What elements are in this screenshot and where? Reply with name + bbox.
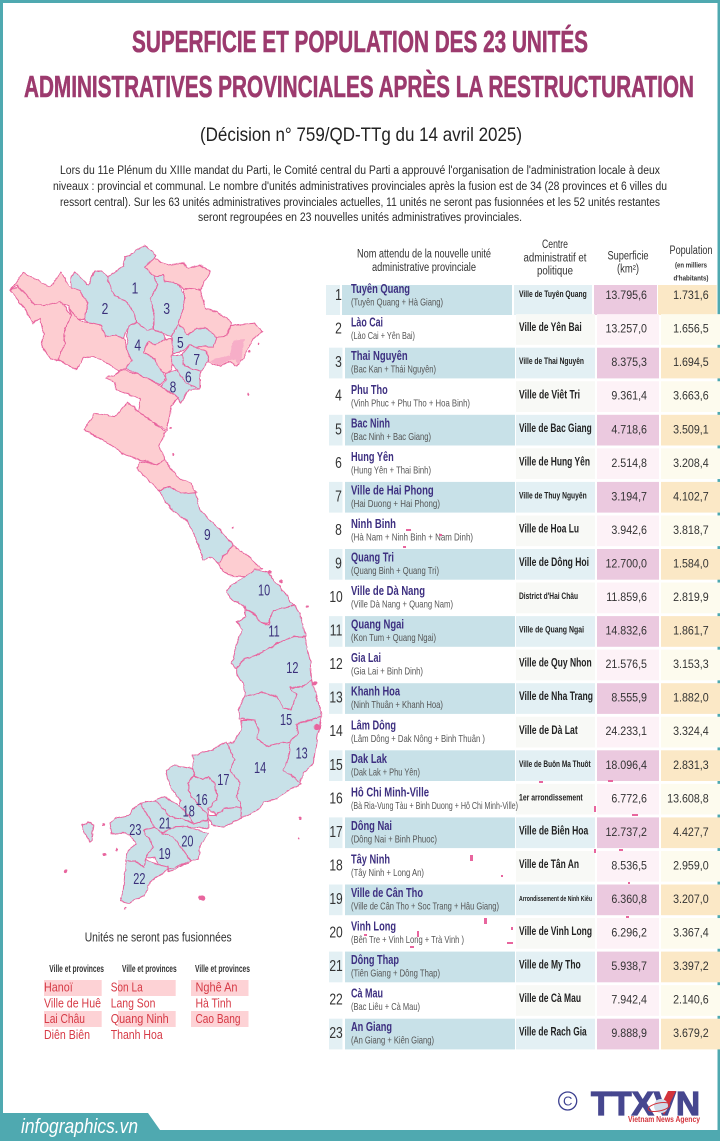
row 21: 5.938,7 (611, 961, 647, 973)
title (24, 24, 694, 104)
row 10: District d'Hai Châu (519, 591, 578, 601)
row 21 (329, 952, 720, 982)
legend title: Unités ne seront pas fusionnées (85, 931, 232, 945)
map number labels: 16 (196, 791, 208, 809)
map number labels: 11 (268, 622, 280, 640)
row 23: An Giang (351, 1020, 392, 1034)
copyright symbol: C (563, 1094, 572, 1108)
map number labels (102, 279, 308, 888)
row 17: 17 (329, 822, 343, 840)
row 15: (Dak Lak + Phu Yên) (351, 767, 420, 778)
row 1: Ville de Tuyên Quang (519, 289, 587, 299)
row 22: 22 (329, 990, 343, 1008)
logo: TTXVN Vietnam News Agency: TTXVN (591, 1085, 700, 1122)
row 5: 4.718,6 (611, 424, 647, 436)
logo: TTXVN Vietnam News Agency: Vietnam News Agency (628, 1115, 700, 1124)
row 12 (329, 650, 720, 680)
row 15: 2.831,3 (673, 759, 709, 772)
row 14: 14 (329, 722, 343, 740)
row 3: Ville de Thai Nguyên (519, 356, 584, 366)
row 9: 1.584,0 (673, 558, 709, 571)
map number labels: 9 (204, 525, 211, 543)
row 8 (335, 515, 720, 546)
row 5: 5 (335, 420, 342, 438)
legend column 3: Hà Tinh (196, 997, 232, 1011)
legend column 1: Diên Biên (44, 1028, 90, 1042)
legend column 2: Lang Son (111, 997, 155, 1011)
row 11 (329, 616, 720, 647)
legend column 1 (44, 981, 101, 1042)
footer tab: infographics.vn: infographics.vn (21, 1116, 138, 1138)
table header: (km²) (617, 264, 639, 276)
row 8: 8 (335, 520, 342, 538)
row 18: 8.536,5 (611, 860, 647, 873)
row 1: (Tuyên Quang + Hà Giang) (351, 298, 443, 309)
row 10 (329, 583, 720, 613)
row 9 (329, 549, 720, 580)
row 7: 3.194,7 (611, 491, 647, 504)
legend column 1: Ville de Huê (44, 997, 101, 1011)
row 20: 20 (329, 923, 343, 941)
row 23: Ville de Rach Gia (519, 1027, 587, 1039)
map number labels: 20 (181, 833, 194, 850)
table header: Centre (542, 239, 568, 251)
intro paragraph (53, 165, 667, 224)
row 8: 3.818,7 (673, 524, 709, 537)
row 12: Ville de Quy Nhon (519, 658, 592, 670)
row 1: 1.731,6 (673, 290, 709, 302)
row 2: 1.656,5 (673, 323, 709, 336)
row 12: Gia Lai (351, 651, 381, 665)
row 6: Ville de Hung Yên (519, 456, 590, 468)
row 8: (Hà Nam + Ninh Binh + Nam Dinh) (351, 532, 473, 543)
row 13 (329, 683, 720, 714)
map number labels: 22 (133, 870, 145, 888)
map number labels: 19 (159, 845, 171, 863)
row 18: (Tây Ninh + Long An) (351, 868, 424, 879)
table header: administratif et (524, 253, 587, 265)
row 6: (Hung Yên + Thai Binh) (351, 465, 431, 476)
intro paragraph: Lors du 11e Plénum du XIIIe mandat du Parti, le Comité central du Parti a approuvé l'organisation de l'administration locale à deux (60, 165, 660, 177)
row 3: 1.694,5 (673, 357, 709, 369)
row 19: 19 (329, 890, 343, 907)
row 18: 18 (329, 856, 343, 874)
row 15 (329, 750, 720, 781)
intro paragraph: seront regroupées en 23 nouvelles unités administratives provinciales. (198, 212, 522, 224)
row 15: 15 (329, 755, 343, 773)
legend column headings: Ville et provinces (122, 964, 177, 975)
table header: Superficie (608, 251, 648, 263)
row 19 (329, 884, 720, 915)
row 15: 18.096,4 (605, 759, 647, 772)
row 20: Ville de Vinh Long (519, 926, 592, 938)
row 1 (326, 282, 717, 315)
row 3 (329, 348, 720, 378)
map number labels: 10 (258, 582, 270, 599)
row 23: (An Giang + Kiên Giang) (351, 1036, 434, 1047)
row 5: 3.509,1 (673, 424, 709, 436)
row 3: 3 (335, 353, 342, 371)
map number labels: 5 (177, 333, 184, 351)
row 13: (Ninh Thuân + Khanh Hoa) (351, 700, 443, 711)
row 15: Ville de Buôn Ma Thuôt (519, 759, 591, 769)
row 12: 12 (329, 655, 343, 672)
row 9: 9 (335, 554, 342, 572)
row 3: 8.375,3 (611, 357, 647, 369)
map number labels: 4 (134, 336, 141, 354)
row 5: Bac Ninh (351, 416, 390, 430)
row 11: (Kon Tum + Quang Ngai) (351, 633, 436, 644)
row 7: 4.102,7 (673, 491, 709, 504)
row 21: 3.397,2 (673, 961, 709, 973)
row 6: Hung Yên (351, 450, 394, 464)
legend column 2: Son La (111, 981, 143, 995)
row 19: Arrondissement de Ninh Kiêu (519, 894, 592, 903)
row 16: 1er arrondissement (519, 792, 583, 802)
row 1: 1 (335, 286, 342, 303)
legend striped backgrounds (44, 980, 248, 1027)
row 7: 7 (335, 487, 342, 505)
row 13: 13 (329, 688, 343, 706)
map number labels: 13 (296, 744, 308, 762)
row 6: 6 (335, 453, 342, 471)
row 20: Vinh Long (351, 920, 396, 934)
row 2: (Lào Cai + Yên Bai) (351, 331, 415, 342)
row 16: Hô Chi Minh-Ville (351, 785, 429, 799)
legend: units not merged (44, 931, 250, 1042)
row 4 (335, 381, 720, 412)
row 13: Ville de Nha Trang (519, 691, 593, 703)
row 4: Phu Tho (351, 383, 388, 397)
row 11: 11 (330, 621, 343, 639)
row 22 (329, 985, 720, 1016)
copyright symbol (559, 1092, 577, 1110)
row 10: (Ville Dà Nang + Quang Nam) (351, 600, 453, 611)
row 4: (Vinh Phuc + Phu Tho + Hoa Binh) (351, 398, 470, 409)
row 1: Tuyên Quang (351, 282, 410, 296)
row 19: (Ville de Cân Tho + Soc Trang + Hâu Giang) (351, 902, 499, 912)
row 10: 11.859,6 (606, 592, 647, 604)
row 21: Dông Thap (351, 953, 399, 967)
map of Vietnam (10, 245, 322, 909)
row 19: Ville de Cân Tho (351, 886, 423, 900)
legend column 2: Quang Ninh (111, 1012, 169, 1026)
row 7: Ville de Thuy Nguyên (519, 490, 587, 500)
table header: administrative provinciale (372, 262, 476, 274)
table rows (326, 282, 720, 1049)
subtitle: decision: (Décision n° 759/QD-TTg du 14 avril 2025) (200, 124, 522, 146)
row 12: (Gia Lai + Binh Dinh) (351, 667, 423, 678)
row 12: 3.153,3 (673, 659, 709, 671)
row 10: 10 (329, 588, 343, 605)
row 5 (329, 415, 720, 446)
table header: Nom attendu de la nouvelle unité (357, 249, 491, 261)
map number labels: 21 (159, 814, 171, 832)
row 8: Ville de Hoa Lu (519, 523, 579, 535)
row 16: 6.772,6 (611, 793, 647, 806)
table header (357, 239, 712, 283)
row 20: (Bên Tre + Vinh Long + Trà Vinh ) (351, 935, 464, 946)
row 6: 3.208,4 (673, 457, 709, 470)
row 7: Ville de Hai Phong (351, 483, 434, 497)
map number labels: 6 (185, 368, 192, 386)
legend column headings: Ville et provinces (49, 964, 104, 975)
row 19: 6.360,8 (611, 893, 647, 906)
row 2 (335, 314, 720, 345)
row 13: Khanh Hoa (351, 685, 401, 699)
intro paragraph: ressort central). Sur les 63 unités administratives provinciales actuelles, 11 unités ne seront pas fusionnées et les 52 unités restantes (60, 197, 660, 209)
row 11: Ville de Quang Ngai (519, 625, 584, 635)
row 8: Ninh Binh (351, 517, 396, 531)
row 22: Cà Mau (351, 987, 383, 1001)
row 13: 8.555,9 (611, 692, 647, 705)
row 16: 13.608,8 (667, 793, 709, 806)
table header: d'habitants) (674, 274, 709, 283)
row 5: (Bac Ninh + Bac Giang) (351, 432, 431, 443)
legend column 2: Thanh Hoa (111, 1028, 163, 1042)
row 3: Thai Nguyên (351, 349, 408, 363)
legend column 3 (196, 981, 241, 1026)
map number labels: 23 (129, 821, 141, 839)
map number labels: 2 (102, 299, 108, 317)
row 21: Ville de My Tho (519, 960, 581, 972)
row 10: 2.819,9 (673, 592, 709, 604)
row 18: Ville de Tân An (519, 859, 579, 871)
row 17: 4.427,7 (673, 826, 709, 839)
row 9: 12.700,0 (605, 558, 647, 571)
row 14: 24.233,1 (605, 726, 647, 738)
map number labels: 14 (254, 759, 266, 777)
map number labels: 7 (193, 350, 200, 368)
row 17: Dông Nai (351, 819, 392, 833)
row 11: Quang Ngai (351, 618, 404, 632)
row 20 (329, 918, 720, 949)
row 9: Quang Tri (351, 550, 394, 564)
map number labels: 17 (217, 771, 229, 789)
row 14: Lâm Dông (351, 718, 396, 732)
row 17: (Dông Nai + Binh Phuoc) (351, 834, 437, 845)
row 8: 3.942,6 (611, 524, 647, 537)
map number labels: 1 (132, 279, 138, 297)
map: northern and central provinces (10, 245, 272, 577)
row 14: (Lâm Dông + Dak Nông + Binh Thuân ) (351, 734, 485, 745)
row 21: 21 (329, 957, 343, 974)
row 14: 3.324,4 (673, 726, 709, 738)
row 2: Ville de Yên Bai (519, 322, 582, 334)
row 4: 3.663,6 (673, 390, 709, 403)
row 17 (329, 817, 720, 848)
legend column 3: Cao Bang (196, 1012, 241, 1026)
map number labels: 8 (170, 378, 176, 396)
footer tab: infographics.vn (0, 1113, 720, 1141)
row 16: (Bà Ria-Vung Tàu + Binh Duong + Hô Chi Minh-Ville) (351, 801, 518, 812)
row 11: 1.861,7 (673, 625, 709, 638)
table header: politique (537, 266, 573, 278)
row 16 (329, 784, 720, 815)
row 21: (Tiên Giang + Dông Thap) (351, 969, 440, 980)
row 5: Ville de Bac Giang (519, 423, 592, 435)
row 1: 13.795,6 (605, 290, 647, 302)
map island specks over the table (364, 529, 638, 948)
legend column headings: Ville et provinces (195, 964, 250, 975)
row 7 (329, 482, 720, 513)
intro paragraph: niveaux : provincial et communal. Le nombre d'unités administratives provinciales après la fusion est de 34 (28 provinces et 6 villes du (53, 181, 667, 193)
legend column 2 (111, 981, 169, 1042)
row 15: Dak Lak (351, 752, 387, 766)
map number labels: 18 (183, 802, 195, 820)
row 23: 3.679,2 (673, 1028, 709, 1040)
legend column 3: Nghê An (196, 981, 238, 995)
row 6: 2.514,8 (611, 457, 647, 470)
legend column 1: Lai Châu (44, 1012, 85, 1026)
row 2: 13.257,0 (605, 323, 647, 336)
row 18 (329, 851, 720, 882)
row 6 (335, 448, 720, 479)
row 22: 7.942,4 (611, 994, 647, 1007)
row 9: (Quang Binh + Quang Tri) (351, 566, 439, 577)
row 14: Ville de Dà Lat (519, 725, 578, 737)
row 20: 6.296,2 (611, 927, 647, 940)
row 11: 14.832,6 (605, 625, 647, 638)
row 23 (329, 1019, 720, 1049)
row 3: (Bac Kan + Thái Nguyên) (351, 365, 436, 376)
row 4: 9.361,4 (611, 390, 647, 403)
map: southern provinces (64, 570, 322, 909)
legend column 1: Hanoï (44, 981, 73, 995)
row 20: 3.367,4 (673, 927, 709, 940)
row 12: 21.576,5 (605, 659, 647, 671)
row 23: 9.888,9 (611, 1028, 647, 1040)
row 18: Tây Ninh (351, 852, 390, 866)
row 17: 12.737,2 (605, 826, 647, 839)
row 2: Lào Cai (351, 316, 383, 330)
row 10: Ville de Dà Nang (351, 584, 425, 598)
row 19: 3.207,0 (673, 893, 709, 906)
legend column headings (49, 964, 250, 975)
row 23: 23 (329, 1024, 343, 1042)
table header: (en milliers (675, 261, 707, 270)
row 18: 2.959,0 (673, 860, 709, 873)
map number labels: 12 (286, 659, 298, 677)
row 17: Ville de Biên Hoa (519, 825, 589, 837)
map number labels: 3 (163, 299, 170, 317)
row 2: 2 (335, 319, 342, 337)
row 22: Ville de Cà Mau (519, 993, 581, 1005)
row 22: (Bac Liêu + Cà Mau) (351, 1002, 420, 1013)
row 14 (329, 717, 720, 747)
row 4: Ville de Viêt Tri (519, 389, 580, 401)
row 22: 2.140,6 (673, 994, 709, 1007)
row 4: 4 (335, 386, 342, 404)
row 13: 1.882,0 (673, 692, 709, 705)
row 16: 16 (329, 789, 343, 807)
row 7: (Hai Duong + Hai Phong) (351, 499, 440, 510)
row 9: Ville de Dông Hoi (519, 557, 589, 569)
map number labels: 15 (280, 711, 292, 729)
